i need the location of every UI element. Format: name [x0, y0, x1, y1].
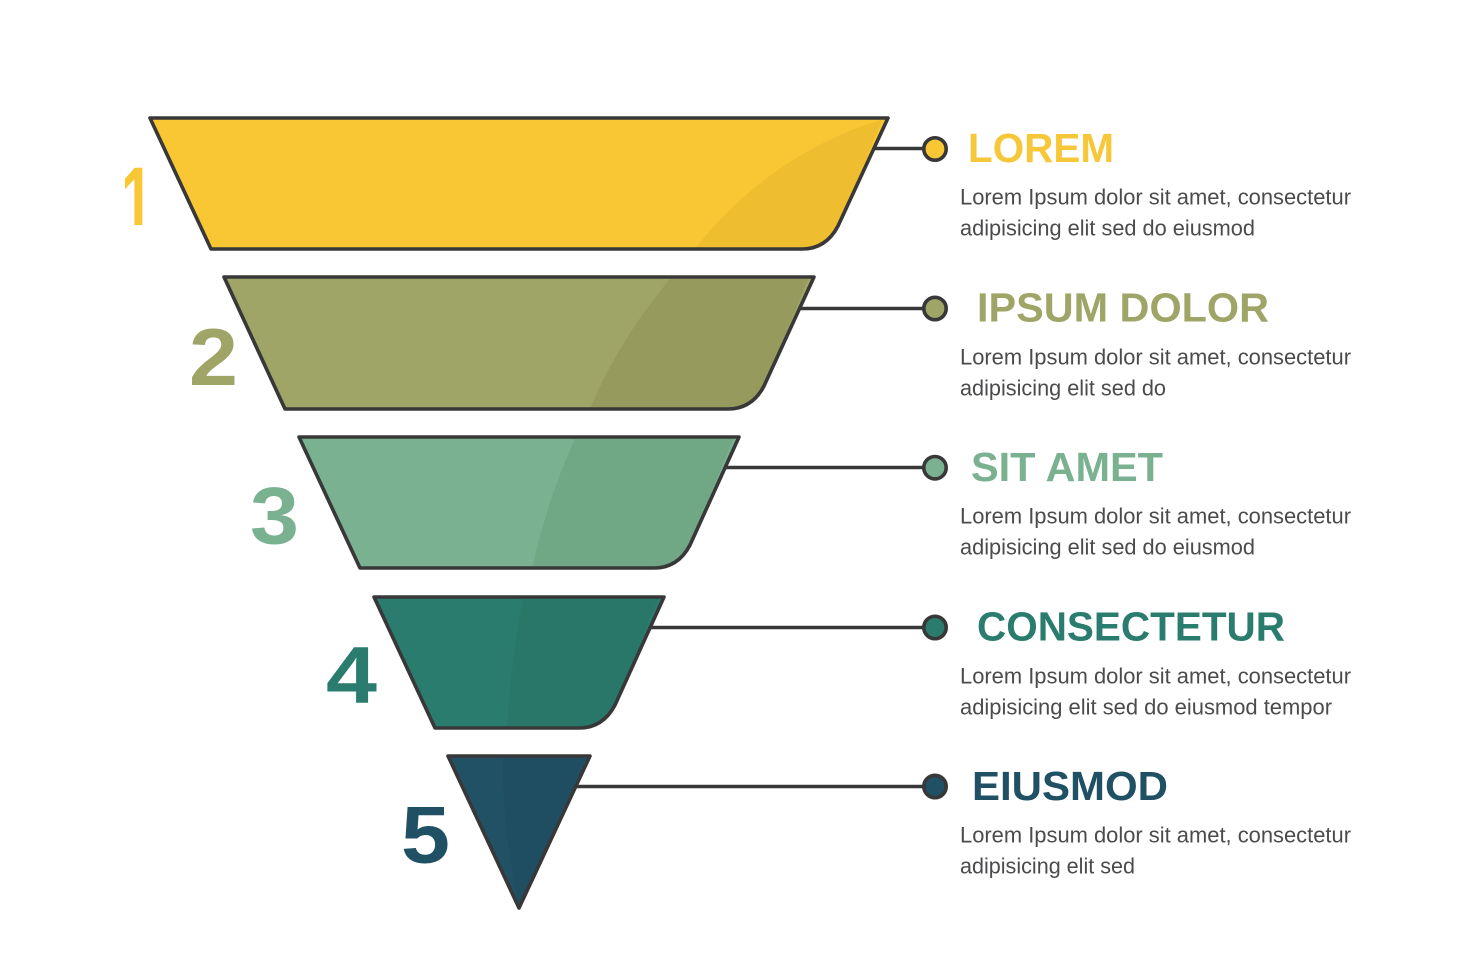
step 5	[401, 756, 1351, 908]
connector line 2	[798, 307, 925, 310]
description 2: Lorem Ipsum dolor sit amet, consectetur	[960, 344, 1351, 370]
marker dot 3	[924, 456, 946, 479]
number 4: 4	[326, 631, 377, 721]
number 5: 5	[401, 790, 450, 880]
step 4	[326, 597, 1351, 728]
heading 5: EIUSMOD	[972, 763, 1168, 809]
description 5: adipisicing elit sed	[960, 854, 1135, 878]
description 2	[960, 344, 1351, 400]
description 1	[960, 184, 1351, 240]
connector line 5	[576, 785, 925, 788]
description 4: adipisicing elit sed do eiusmod tempor	[960, 694, 1332, 720]
description 3	[960, 504, 1351, 560]
description 1: adipisicing elit sed do eiusmod	[960, 216, 1255, 240]
connector line 4	[650, 626, 925, 629]
description 3: Lorem Ipsum dolor sit amet, consectetur	[960, 504, 1351, 528]
funnel segment 2	[224, 277, 814, 409]
funnel segment 4	[374, 597, 664, 728]
funnel segment 1	[150, 118, 888, 249]
number 1: 1	[121, 147, 153, 256]
step 1	[121, 118, 1351, 256]
description 3: adipisicing elit sed do eiusmod	[960, 534, 1255, 560]
description 4	[960, 664, 1351, 720]
heading 4: CONSECTETUR	[977, 604, 1285, 650]
connector line 1	[872, 147, 925, 150]
heading 1: LOREM	[968, 125, 1114, 171]
marker dot 4	[924, 616, 946, 639]
heading 2: IPSUM DOLOR	[977, 284, 1269, 330]
connector line 3	[724, 466, 925, 469]
step 2	[189, 277, 1351, 409]
step 3	[250, 437, 1351, 568]
number 2: 2	[189, 313, 238, 403]
number 3: 3	[250, 472, 299, 562]
funnel segment 3	[299, 437, 739, 568]
funnel infographic	[124, 116, 1351, 910]
marker dot 5	[924, 775, 946, 798]
description 5: Lorem Ipsum dolor sit amet, consectetur	[960, 822, 1351, 848]
funnel segment 5	[448, 756, 590, 908]
description 2: adipisicing elit sed do	[960, 376, 1166, 400]
description 1: Lorem Ipsum dolor sit amet, consectetur	[960, 184, 1351, 210]
marker dot 1	[924, 138, 946, 160]
heading 3: SIT AMET	[971, 444, 1163, 490]
description 5	[960, 822, 1351, 878]
marker dot 2	[924, 297, 946, 320]
description 4: Lorem Ipsum dolor sit amet, consectetur	[960, 664, 1351, 688]
